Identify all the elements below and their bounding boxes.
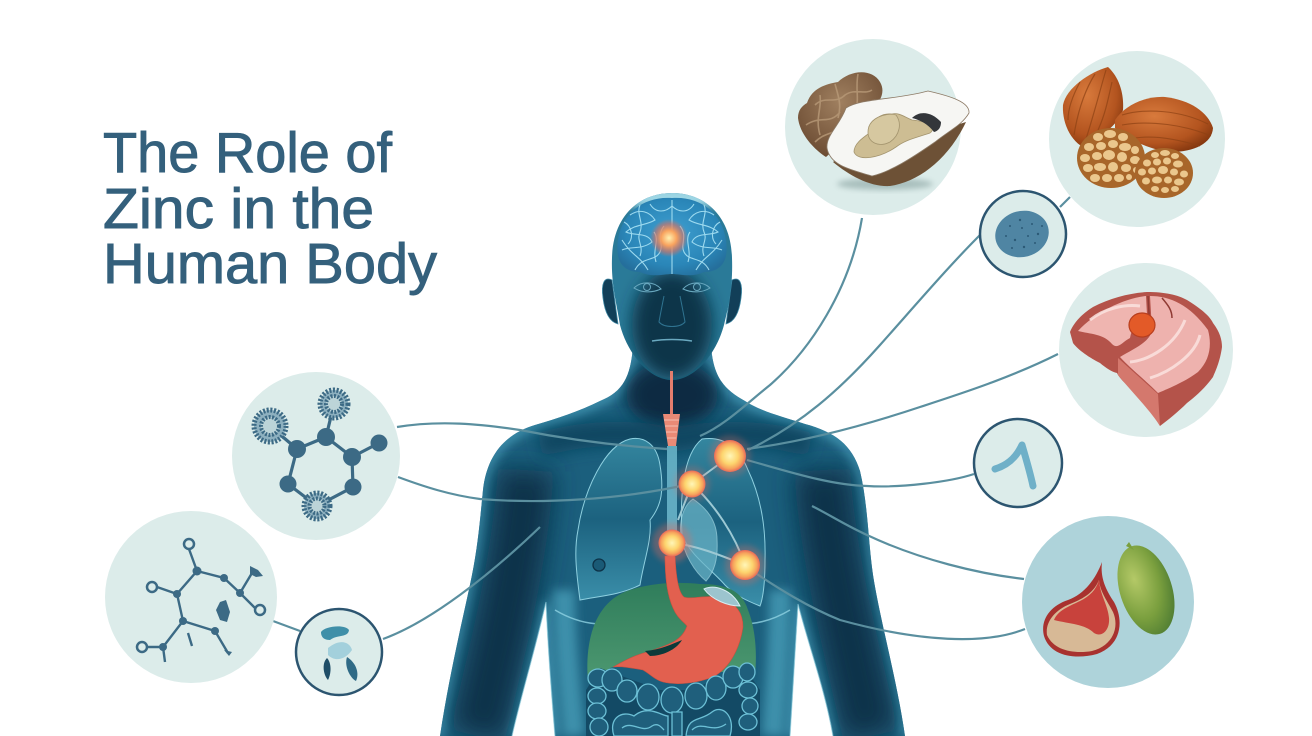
bonds: [147, 549, 255, 662]
walnut small: [1135, 148, 1193, 198]
head: [612, 186, 732, 380]
almond left: [1063, 67, 1123, 147]
stomach: [613, 556, 743, 684]
ring atoms: [137, 539, 265, 652]
node links: [672, 456, 745, 565]
dark spot: [912, 113, 941, 132]
line: molecule upper: [397, 423, 667, 449]
atoms: [280, 428, 388, 496]
face features: [634, 283, 710, 341]
panel: oyster and truffle: [785, 39, 969, 215]
panel: muscle cross section: [1059, 263, 1233, 437]
panel: fig and green fruit: [1022, 516, 1194, 688]
line: fruit lower to body: [745, 566, 1025, 639]
title: Human Body: [103, 232, 437, 296]
walnut large: [1077, 128, 1145, 188]
connector lines: [273, 197, 1070, 639]
spiky atoms: [254, 390, 348, 519]
bonds: [270, 404, 379, 506]
muscle outer: [1070, 292, 1222, 426]
oyster shell: [827, 91, 969, 190]
title: The Role of: [103, 121, 392, 185]
red circle: [1129, 313, 1155, 337]
panel: molecule lower: [105, 511, 277, 683]
fig half: [1043, 562, 1120, 657]
lungs: [576, 438, 765, 606]
torso and arms: [440, 345, 905, 736]
trachea tube: [667, 446, 677, 536]
panel: organ icon: [296, 609, 382, 695]
almond right: [1115, 97, 1213, 152]
larynx cone: [663, 414, 680, 446]
liver shadow gap: [645, 640, 682, 656]
green fruit: [1107, 538, 1185, 642]
line: Y icon to body: [747, 460, 974, 486]
brain: [617, 198, 727, 275]
line: nuts to stone: [1060, 197, 1070, 207]
line: oyster to body: [700, 218, 862, 436]
panel: molecule upper: [232, 372, 400, 540]
human body figure: [440, 186, 905, 736]
panel: Y shaped icon: [974, 419, 1062, 507]
line: organ icon to arm: [383, 527, 540, 639]
gallbladder: [704, 587, 740, 606]
intestines: [586, 663, 760, 736]
line: fruit upper to arm: [812, 506, 1024, 579]
line: left molecule to organ icon: [273, 621, 300, 631]
line: stone to body: [748, 235, 980, 450]
zinc glow nodes: [652, 435, 765, 585]
brain glow: [650, 219, 688, 257]
title: [103, 121, 437, 296]
inner lung lobe: [681, 499, 717, 581]
panel: almonds and walnuts: [1049, 51, 1225, 227]
oyster meat: [854, 114, 933, 158]
nipple: [593, 559, 605, 571]
liver: [587, 583, 756, 688]
panel: stone icon: [980, 191, 1066, 277]
line: molecule lower: [398, 477, 690, 501]
atoms: [159, 566, 263, 656]
muscle pink interior: [1078, 296, 1147, 346]
line: meat to body: [747, 354, 1058, 449]
title: Zinc in the: [103, 177, 374, 241]
ears: [602, 279, 742, 324]
truffle: [798, 72, 882, 157]
esophagus red line: [670, 371, 673, 414]
